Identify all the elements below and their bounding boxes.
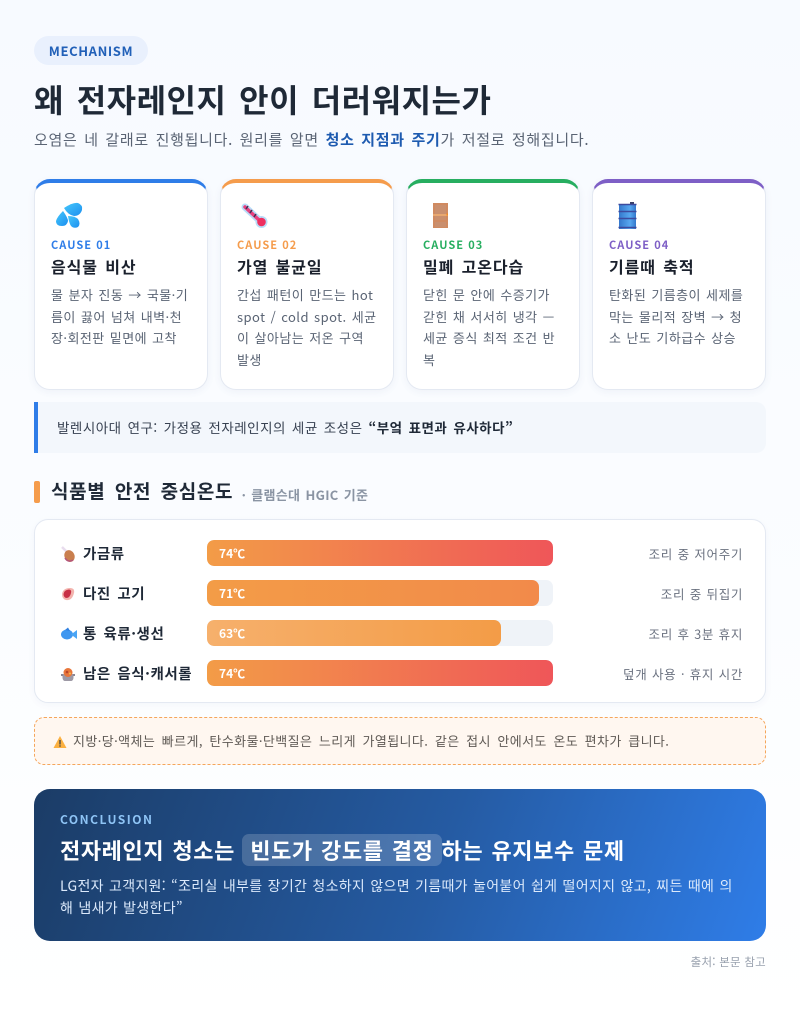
conclusion heading: 빈도가 강도를 결정 [250, 834, 434, 866]
card heading: 밀폐 고온다습 [423, 254, 524, 278]
card text [423, 285, 555, 368]
panel: cause 03 [406, 179, 580, 390]
card text: 닫힌 문 안에 수증기가 [423, 285, 550, 304]
label: CAUSE 01 [51, 237, 111, 253]
callout: warning [34, 717, 766, 765]
icon: drumstick [61, 546, 75, 562]
warning text: 지방·당·액체는 빠르게, 탄수화물·단백질은 느리게 가열됩니다. 같은 접시 안에서도 온도 편차가 큽니다. [73, 731, 669, 750]
note: 조리 후 3분 휴지 [649, 624, 743, 643]
card text [237, 285, 377, 368]
icon: thermometer [242, 204, 268, 228]
conclusion text: 해 냄새가 발생한다” [60, 898, 183, 918]
icon: meat [62, 588, 74, 600]
conclusion heading: 전자레인지 청소는 하는 유지보수 문제 [60, 834, 625, 866]
note: 조리 중 뒤집기 [661, 584, 743, 603]
icon: fish [61, 628, 77, 640]
card heading: 음식물 비산 [51, 254, 136, 278]
panel: cause 02 [220, 179, 394, 390]
card text: 이 살아남는 저온 구역 [237, 328, 364, 347]
bar 63 [207, 620, 553, 646]
note: 덮개 사용 · 휴지 시간 [623, 664, 743, 683]
label: 다진 고기 [83, 583, 145, 604]
label: 통 육류·생선 [83, 623, 164, 644]
icon: door [433, 203, 448, 228]
card text: 물 분자 진동 → 국물·기 [51, 285, 188, 304]
panel: cause 01 [34, 179, 208, 390]
card text: 막는 물리적 장벽 → 청 [609, 306, 742, 326]
card text: 세균 증식 최적 조건 반 [423, 328, 555, 347]
subtitle: 오염은 네 갈래로 진행됩니다. 원리를 알면 청소 지점과 주기가 저절로 정해집니다. [34, 129, 589, 150]
bar 71 [207, 580, 553, 606]
card text: 소 난도 기하급수 상승 [609, 328, 736, 347]
label: 가금류 [83, 543, 125, 564]
card text: 갇힌 채 서서히 냉각 — [423, 306, 555, 326]
note: 조리 중 저어주기 [649, 544, 743, 563]
bar 74: 74℃ [219, 545, 245, 562]
card text: 름이 끓어 넘쳐 내벽·천 [51, 306, 182, 326]
label: CAUSE 02 [237, 237, 297, 253]
conclusion text: LG전자 고객지원: “조리실 내부를 장기간 청소하지 않으면 기름때가 눌어붙어 쉽게 떨어지지 않고, 찌든 때에 의 [60, 876, 733, 896]
icon: stew pot [61, 668, 75, 681]
card heading: 기름때 축적 [609, 254, 694, 278]
label: 남은 음식·캐서롤 [83, 663, 192, 684]
card text: 장·회전판 밑면에 고착 [51, 328, 177, 347]
section heading: food safety: 식품별 안전 중심온도 · 클램슨대 HGIC 기준 [51, 477, 368, 504]
card text: 간섭 패턴이 만드는 hot [237, 285, 373, 304]
row: leftovers [61, 660, 743, 686]
panel: conclusion [34, 789, 766, 941]
card text [609, 285, 743, 347]
tag: mechanism [34, 36, 148, 65]
card text: spot / cold spot. 세균 [237, 306, 377, 326]
label: CAUSE 04 [609, 237, 669, 253]
icon: oil drum [618, 202, 636, 229]
card text: 복 [423, 350, 435, 368]
label: CONCLUSION [60, 811, 153, 828]
card text [51, 285, 188, 347]
card heading: 가열 불균일 [237, 254, 322, 278]
panel: temperature chart [34, 519, 766, 703]
bar 71: 71℃ [219, 585, 245, 602]
card text: 발생 [237, 350, 262, 368]
bar 74 [207, 660, 553, 686]
callout: research quote [34, 402, 766, 453]
row: poultry [61, 540, 743, 566]
panel: cause 04 [592, 179, 766, 390]
tag: mechanism: MECHANISM [49, 41, 133, 60]
callout: research quote: 발렌시아대 연구: 가정용 전자레인지의 세균 조성은 “부엌 표면과 유사하다” [57, 417, 513, 437]
bar 74 [207, 540, 553, 566]
source note: 출처: 본문 참고 [691, 954, 766, 970]
bar 63: 63℃ [219, 625, 245, 642]
card text: 탄화된 기름층이 세제를 [609, 285, 743, 304]
conclusion text [60, 876, 733, 918]
bar 74: 74℃ [219, 665, 245, 682]
title: 왜 전자레인지 안이 더러워지는가 [34, 76, 491, 122]
row: whole meat and fish [61, 620, 743, 646]
label: CAUSE 03 [423, 237, 483, 253]
row: ground meat [62, 580, 743, 606]
icon: water drops [56, 202, 82, 228]
icon: warning triangle [54, 736, 66, 748]
